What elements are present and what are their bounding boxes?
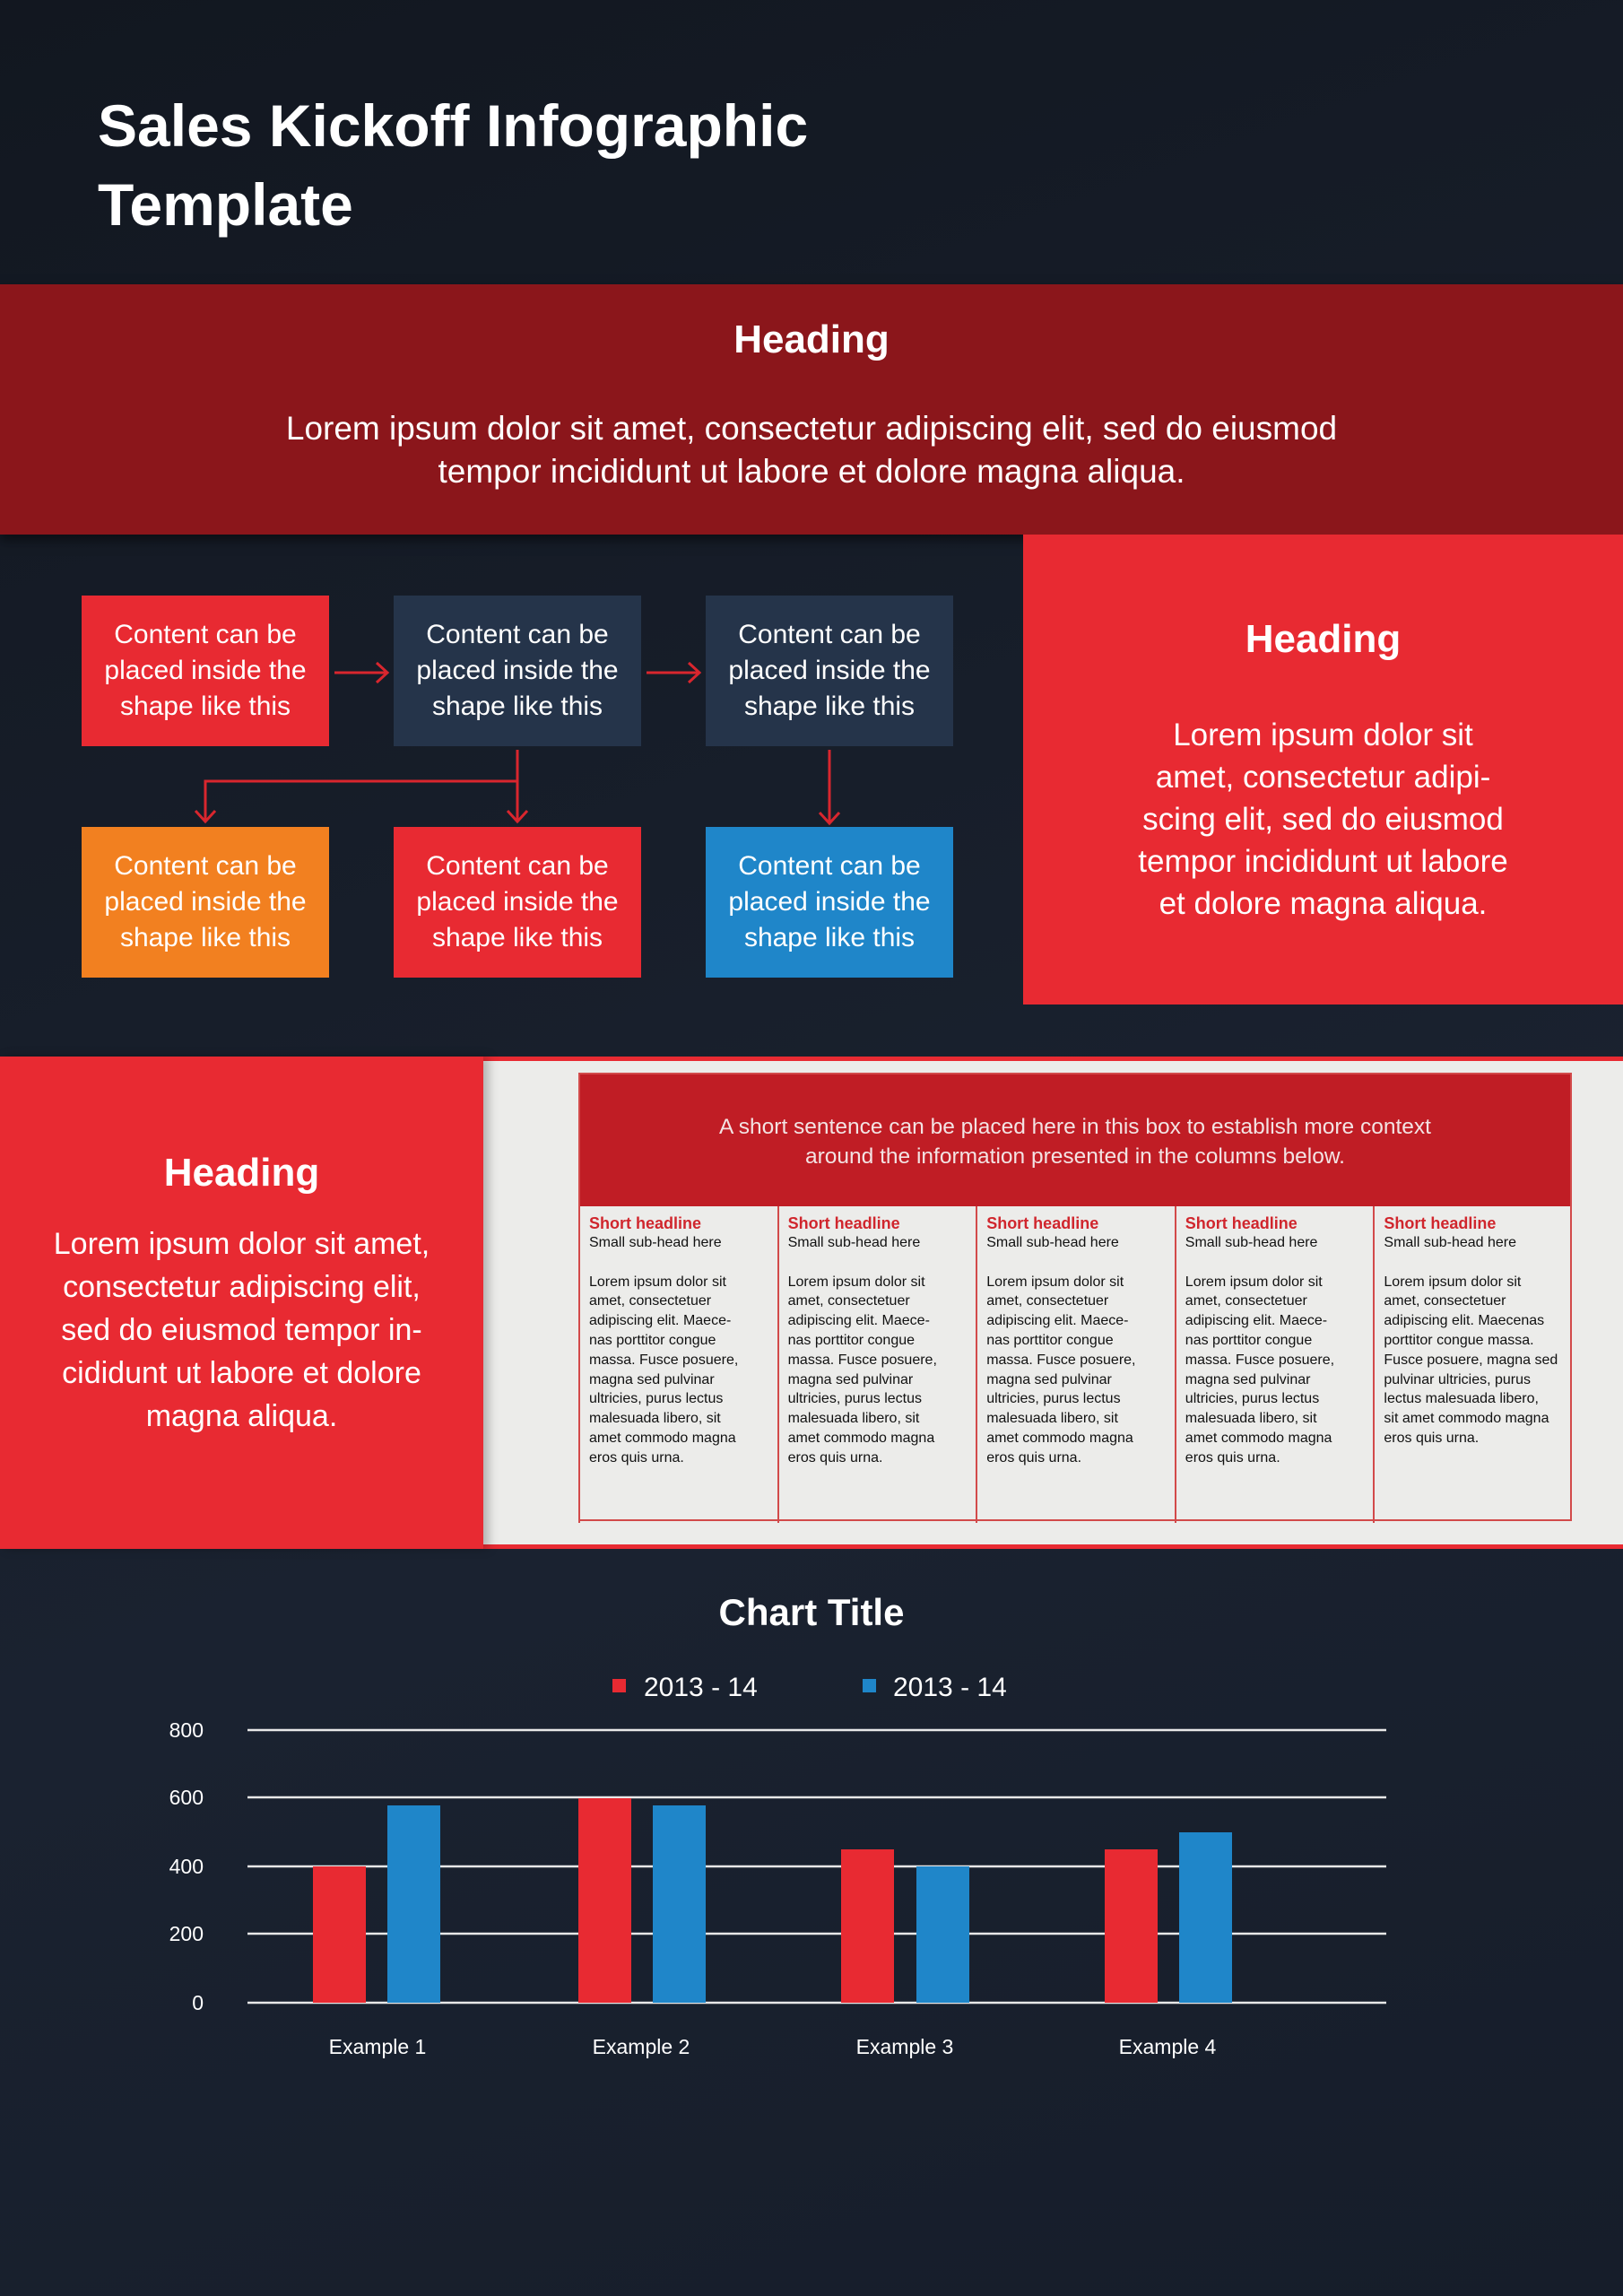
column 1: Small sub-head here	[589, 1235, 722, 1250]
column 4	[1175, 1206, 1373, 1523]
panel: right heading: et dolore magna aliqua.	[1159, 886, 1487, 921]
panel: left heading: Heading	[164, 1151, 319, 1195]
panel: left heading: magna aliqua.	[146, 1399, 337, 1433]
box 1: Content can be	[114, 620, 297, 649]
column 4: amet commodo magna	[1185, 1431, 1332, 1446]
box 2: placed inside the	[416, 656, 619, 685]
column 1: adipiscing elit. Maece-	[589, 1313, 731, 1328]
legend: 2013 - 14	[893, 1673, 1007, 1702]
column 4: Lorem ipsum dolor sit	[1185, 1274, 1323, 1290]
panel: flowchart	[82, 596, 953, 978]
table	[578, 1073, 1572, 1521]
column 2: Small sub-head here	[788, 1235, 920, 1250]
panel: right heading: amet, consectetur adipi-	[1156, 760, 1490, 795]
box 1: placed inside the	[104, 656, 307, 685]
legend	[612, 1673, 1007, 1702]
box 1	[82, 596, 329, 746]
box 5	[394, 827, 641, 978]
column 2: magna sed pulvinar	[788, 1372, 913, 1387]
column 3: Short headline	[986, 1214, 1098, 1232]
column 3: adipiscing elit. Maece-	[986, 1313, 1128, 1328]
column 2: nas porttitor congue	[788, 1333, 915, 1348]
column 1: Short headline	[589, 1214, 701, 1232]
column 1: amet commodo magna	[589, 1431, 736, 1446]
box 3: placed inside the	[728, 656, 931, 685]
table header: around the information presented in the columns below.	[805, 1144, 1345, 1169]
panel: right heading: tempor incididunt ut labore	[1138, 844, 1508, 879]
box 3	[706, 596, 953, 746]
column 2: eros quis urna.	[788, 1450, 882, 1465]
bar chart	[169, 1673, 1386, 2058]
column 1: malesuada libero, sit	[589, 1411, 721, 1426]
bar chart: 600	[169, 1786, 204, 1809]
column 1: nas porttitor congue	[589, 1333, 716, 1348]
column 3: Lorem ipsum dolor sit	[986, 1274, 1124, 1290]
box 6: Content can be	[738, 851, 921, 881]
column 3: amet, consectetuer	[986, 1293, 1108, 1309]
column 3	[976, 1206, 1175, 1523]
column 3: Small sub-head here	[986, 1235, 1119, 1250]
column 2: amet commodo magna	[788, 1431, 934, 1446]
chart title: Chart Title	[719, 1591, 904, 1633]
column 1: ultricies, purus lectus	[589, 1391, 723, 1406]
column 2: Short headline	[788, 1214, 900, 1232]
section: table band	[0, 1057, 1623, 1549]
column 3: amet commodo magna	[986, 1431, 1133, 1446]
legend: 2013 - 14	[644, 1673, 758, 1702]
column 5: pulvinar ultricies, purus	[1384, 1372, 1531, 1387]
column 1: massa. Fusce posuere,	[589, 1352, 738, 1368]
table header	[578, 1074, 1570, 1206]
banner: heading	[0, 284, 1623, 535]
bar chart: 400	[169, 1855, 204, 1878]
box 4: shape like this	[120, 923, 291, 952]
panel: left heading: cididunt ut labore et dolore	[62, 1356, 421, 1390]
column 1: magna sed pulvinar	[589, 1372, 715, 1387]
column 1: amet, consectetuer	[589, 1293, 711, 1309]
banner text: tempor incididunt ut labore et dolore magna aliqua.	[438, 453, 1185, 490]
box 4: Content can be	[114, 851, 297, 881]
column 3: malesuada libero, sit	[986, 1411, 1118, 1426]
panel: right heading: Heading	[1245, 617, 1401, 661]
title	[98, 92, 808, 238]
column 5: sit amet commodo magna	[1384, 1411, 1549, 1426]
panel: left heading: consectetur adipiscing elit,	[63, 1270, 421, 1304]
bar chart: Example 3	[856, 2035, 953, 2058]
table header: A short sentence can be placed here in this box to establish more context	[719, 1115, 1431, 1139]
column 4: malesuada libero, sit	[1185, 1411, 1317, 1426]
column 1	[578, 1206, 777, 1523]
panel: right heading: Lorem ipsum dolor sit	[1173, 718, 1473, 752]
column 2: ultricies, purus lectus	[788, 1391, 922, 1406]
column 5: porttitor congue massa.	[1384, 1333, 1534, 1348]
title: Sales Kickoff Infographic	[98, 92, 808, 159]
box 1: shape like this	[120, 691, 291, 721]
column 3: nas porttitor congue	[986, 1333, 1114, 1348]
panel: right heading: scing elit, sed do eiusmod	[1142, 802, 1504, 837]
column 2: amet, consectetuer	[788, 1293, 910, 1309]
column 4: Short headline	[1185, 1214, 1298, 1232]
column 5: eros quis urna.	[1384, 1431, 1479, 1446]
column 5: Short headline	[1384, 1214, 1496, 1232]
box 6: shape like this	[744, 923, 915, 952]
column 4: eros quis urna.	[1185, 1450, 1280, 1465]
column 2: massa. Fusce posuere,	[788, 1352, 937, 1368]
column 2	[777, 1206, 976, 1523]
column 3: massa. Fusce posuere,	[986, 1352, 1135, 1368]
box 5: placed inside the	[416, 887, 619, 917]
column 3: magna sed pulvinar	[986, 1372, 1112, 1387]
banner text	[286, 410, 1337, 490]
column 2: adipiscing elit. Maece-	[788, 1313, 930, 1328]
banner text: Lorem ipsum dolor sit amet, consectetur adipiscing elit, sed do eiusmod	[286, 410, 1337, 447]
bar chart: 200	[169, 1922, 204, 1945]
box 5: Content can be	[426, 851, 609, 881]
box 6	[706, 827, 953, 978]
column 3: ultricies, purus lectus	[986, 1391, 1121, 1406]
panel: left heading: Lorem ipsum dolor sit amet,	[54, 1227, 430, 1261]
box 5: shape like this	[432, 923, 603, 952]
box 4: placed inside the	[104, 887, 307, 917]
box 2	[394, 596, 641, 746]
bar chart: Example 1	[329, 2035, 426, 2058]
column 3: eros quis urna.	[986, 1450, 1081, 1465]
column 4: adipiscing elit. Maece-	[1185, 1313, 1327, 1328]
box 4	[82, 827, 329, 978]
column 5: lectus malesuada libero,	[1384, 1391, 1539, 1406]
bar chart: Example 2	[593, 2035, 690, 2058]
box 3: shape like this	[744, 691, 915, 721]
arrows	[195, 662, 840, 825]
box 6: placed inside the	[728, 887, 931, 917]
bar chart: 0	[192, 1991, 204, 2014]
banner heading: Heading	[733, 317, 890, 361]
bar chart: 800	[169, 1718, 204, 1742]
column 1: Lorem ipsum dolor sit	[589, 1274, 726, 1290]
box 3: Content can be	[738, 620, 921, 649]
box 2: Content can be	[426, 620, 609, 649]
column 5: amet, consectetuer	[1384, 1293, 1506, 1309]
column 5: adipiscing elit. Maecenas	[1384, 1313, 1544, 1328]
column 1: eros quis urna.	[589, 1450, 684, 1465]
column 4: massa. Fusce posuere,	[1185, 1352, 1334, 1368]
column 4: ultricies, purus lectus	[1185, 1391, 1319, 1406]
panel: left heading: sed do eiusmod tempor in-	[61, 1313, 422, 1347]
bar chart: Example 4	[1119, 2035, 1217, 2058]
column 4: nas porttitor congue	[1185, 1333, 1312, 1348]
column 5: Small sub-head here	[1384, 1235, 1516, 1250]
panel: right heading	[1023, 535, 1623, 1004]
box 2: shape like this	[432, 691, 603, 721]
column 5: Lorem ipsum dolor sit	[1384, 1274, 1521, 1290]
column 4: magna sed pulvinar	[1185, 1372, 1310, 1387]
column 5	[1373, 1206, 1572, 1523]
column 5: Fusce posuere, magna sed	[1384, 1352, 1558, 1368]
column 4: amet, consectetuer	[1185, 1293, 1307, 1309]
column 4: Small sub-head here	[1185, 1235, 1317, 1250]
column 2: malesuada libero, sit	[788, 1411, 919, 1426]
title: Template	[98, 171, 353, 238]
panel: left heading	[0, 1057, 483, 1549]
column 2: Lorem ipsum dolor sit	[788, 1274, 925, 1290]
